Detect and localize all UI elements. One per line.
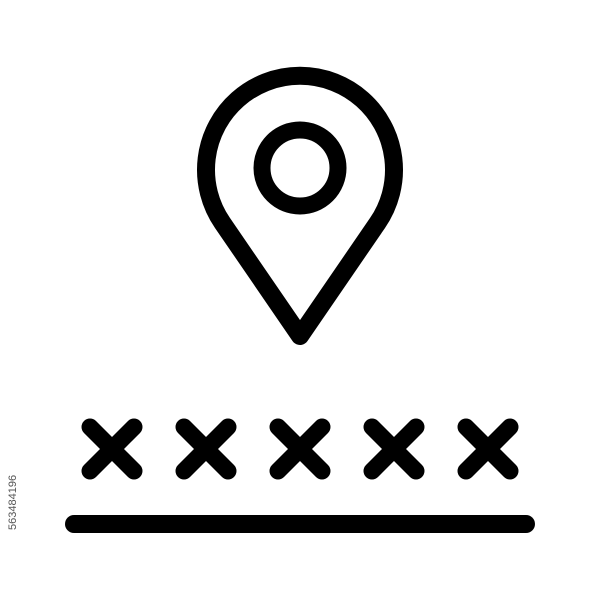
watermark id text: 563484196 — [7, 475, 19, 530]
baseline — [74, 515, 526, 533]
icon: map pin — [206, 76, 394, 336]
row of crosses — [90, 427, 510, 471]
